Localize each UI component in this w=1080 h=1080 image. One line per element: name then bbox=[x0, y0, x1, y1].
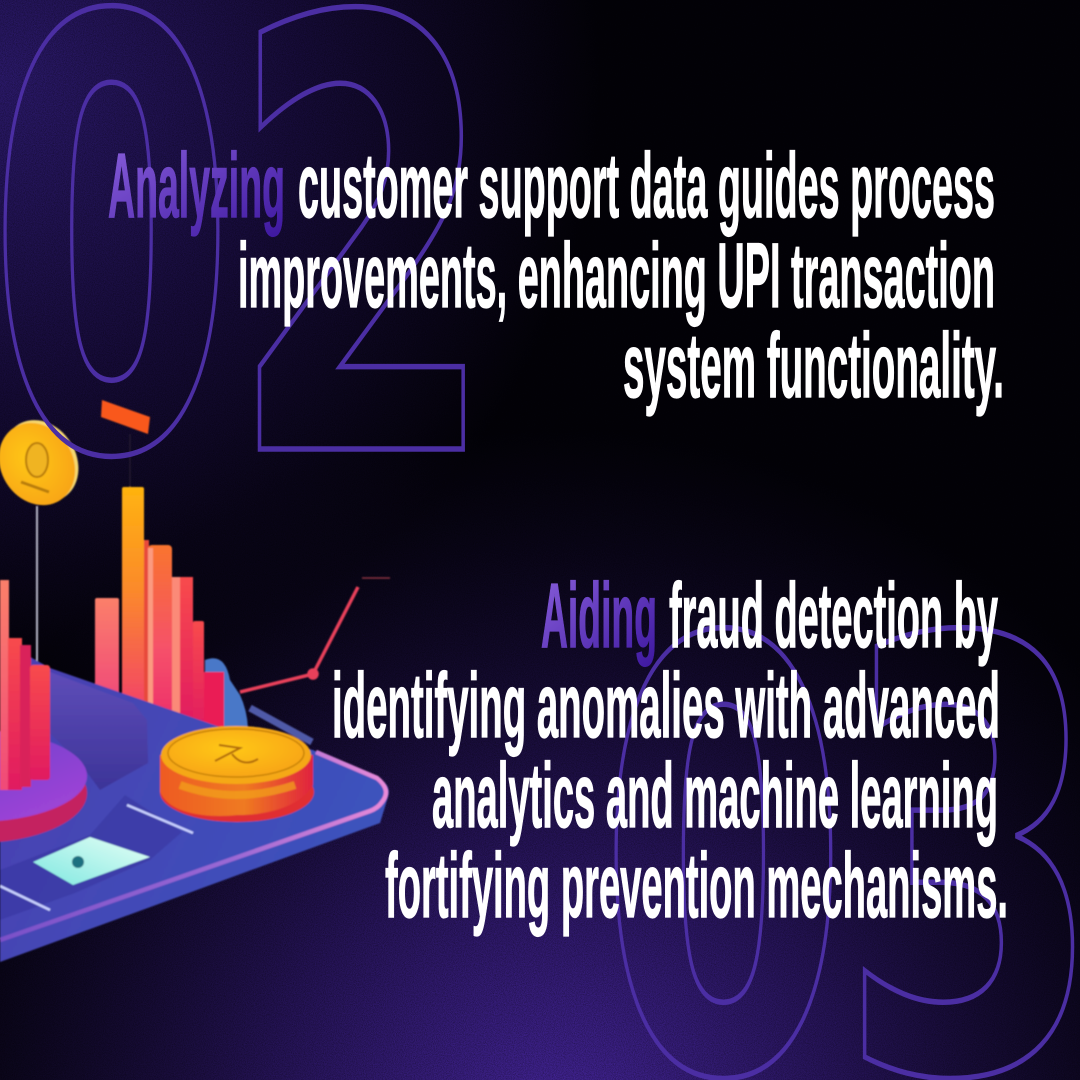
platform bbox=[0, 640, 389, 962]
icon: large gold coin bbox=[160, 726, 314, 822]
text block: analyzing: Analyzing bbox=[108, 135, 285, 237]
icon: floating gold coin bbox=[0, 406, 93, 663]
bar chart: right group bbox=[95, 487, 224, 732]
icon: teal screen bbox=[33, 837, 150, 885]
blue blob bbox=[205, 658, 248, 728]
purple disk bbox=[0, 730, 87, 843]
numeral: 03 outline bbox=[614, 624, 1074, 1080]
illustration: analytics platform with bars and coins bbox=[0, 400, 390, 962]
line chart arrow bbox=[240, 578, 390, 692]
bar chart: left group bbox=[0, 580, 50, 790]
text block: aiding: Aiding bbox=[541, 565, 657, 667]
numeral: 02 outline bbox=[3, 2, 465, 460]
inner panels bbox=[50, 672, 148, 790]
text block: aiding bbox=[332, 565, 1008, 937]
back rim of platform bbox=[250, 708, 312, 742]
icon: orange tag bbox=[101, 400, 150, 434]
platform rim bbox=[0, 752, 386, 940]
text block: analyzing bbox=[108, 135, 1004, 417]
